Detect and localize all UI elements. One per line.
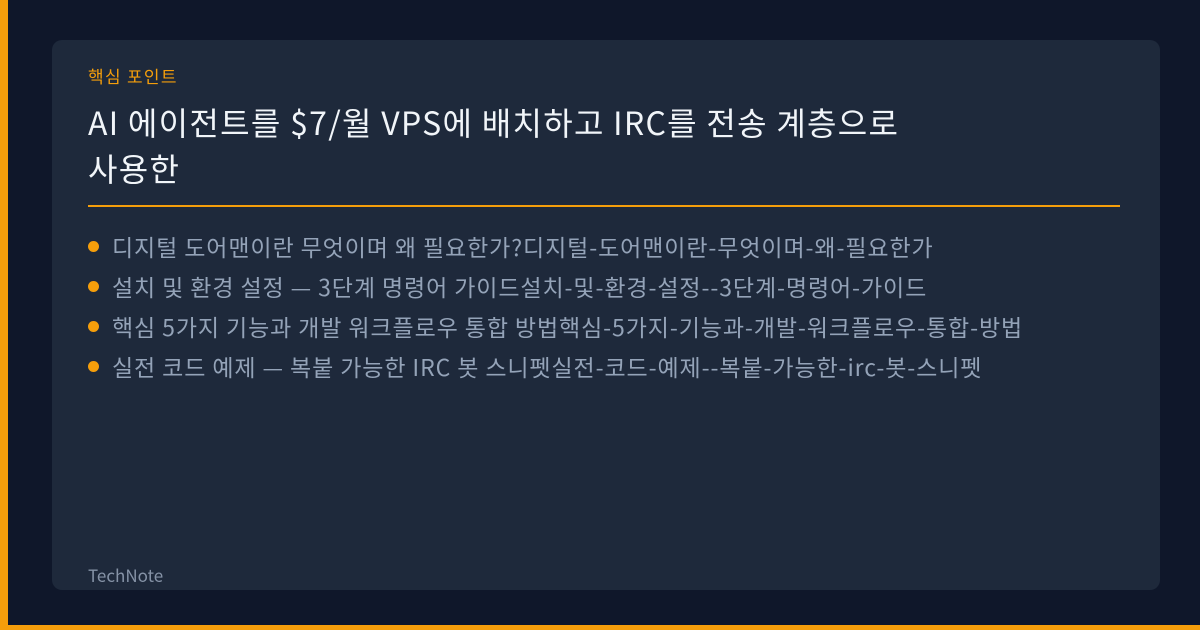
- bullet 1: 디지털 도어맨이란 무엇이며 왜 필요한가?디지털-도어맨이란-무엇이며-왜-필요한가: [112, 229, 934, 263]
- accent bar left: [0, 0, 8, 630]
- accent bar bottom: [0, 625, 1200, 630]
- bullet 2: 설치 및 환경 설정 — 3단계 명령어 가이드설치-및-환경-설정--3단계-명령어-가이드: [112, 269, 927, 303]
- kicker label: 핵심 포인트: [88, 63, 178, 88]
- bullet list: [88, 229, 1023, 383]
- title: 사용한: [88, 145, 180, 191]
- footer brand: TechNote: [88, 562, 163, 587]
- title: [88, 99, 899, 191]
- divider: [88, 205, 1120, 207]
- bullet 3: 핵심 5가지 기능과 개발 워크플로우 통합 방법핵심-5가지-기능과-개발-워크플로우-통합-방법: [112, 309, 1023, 343]
- title: AI 에이전트를 $7/월 VPS에 배치하고 IRC를 전송 계층으로: [88, 99, 899, 145]
- bullet 4: 실전 코드 예제 — 복붙 가능한 IRC 봇 스니펫실전-코드-예제--복붙-가능한-irc-봇-스니펫: [112, 349, 982, 383]
